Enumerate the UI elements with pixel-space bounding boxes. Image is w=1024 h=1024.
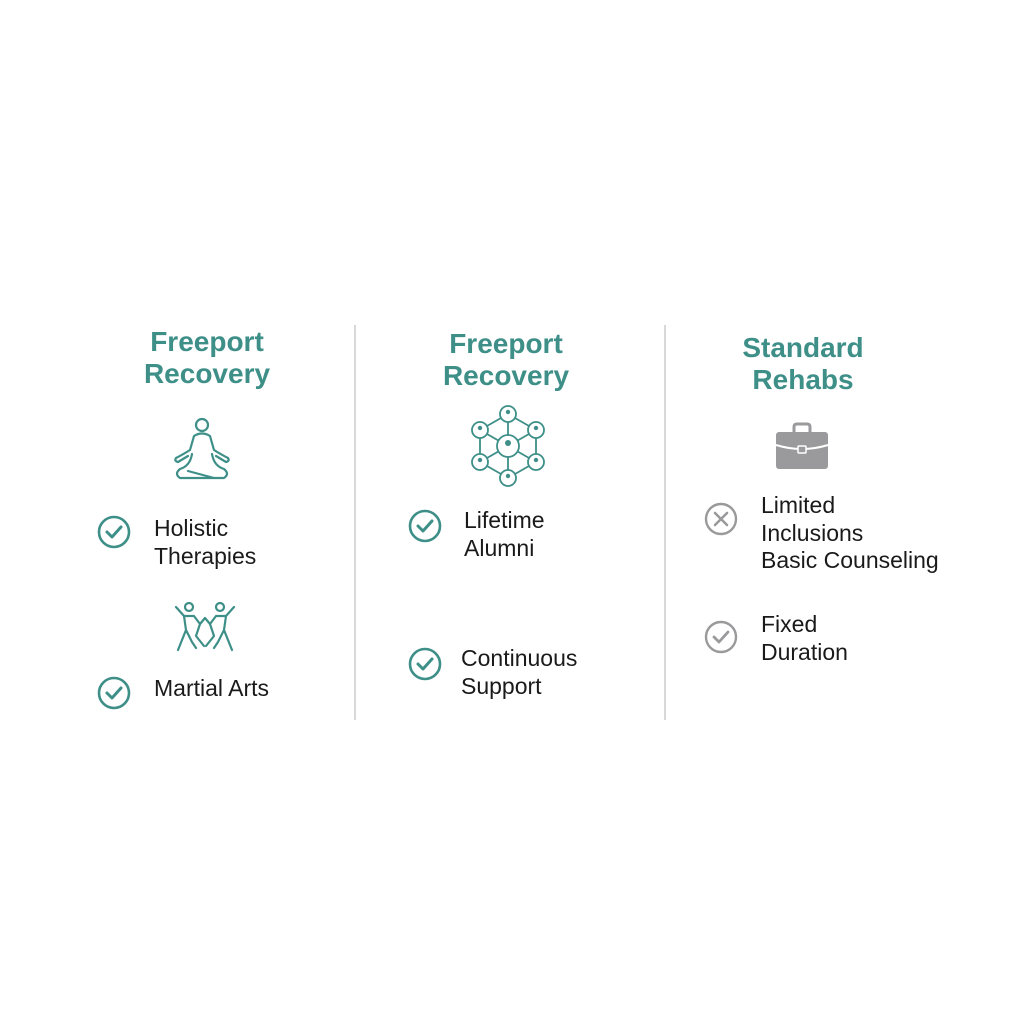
icon: briefcase <box>776 422 828 469</box>
title: Freeport Recovery col2 <box>443 328 569 391</box>
item: Continuous Support: Continuous <box>461 645 577 671</box>
item: Fixed Duration: Duration <box>761 638 848 664</box>
item: Lifetime Alumni <box>408 507 545 560</box>
item: Holistic Therapies: Holistic <box>154 515 228 541</box>
item: Limited Inclusions Basic Counseling: Inclusions <box>761 520 863 546</box>
title: Freeport Recovery col1: Freeport <box>150 326 264 357</box>
title: Standard Rehabs: Standard <box>742 332 864 363</box>
item: Lifetime Alumni: Lifetime <box>464 507 545 533</box>
title: Freeport Recovery col1 <box>144 326 270 389</box>
item: Martial Arts <box>98 675 269 710</box>
title: Standard Rehabs: Rehabs <box>752 364 854 395</box>
title: Freeport Recovery col2: Freeport <box>449 328 563 359</box>
item: Fixed Duration <box>704 611 848 664</box>
item: Limited Inclusions Basic Counseling <box>704 492 939 573</box>
item: Continuous Support <box>408 645 577 699</box>
icon: alumni network <box>471 405 545 487</box>
item: Limited Inclusions Basic Counseling: Basic Counseling <box>761 547 939 573</box>
icon: meditation <box>174 418 230 480</box>
title: Freeport Recovery col2: Recovery <box>443 360 569 391</box>
item: Holistic Therapies <box>98 515 256 569</box>
title: Freeport Recovery col1: Recovery <box>144 358 270 389</box>
item: Holistic Therapies: Therapies <box>154 542 256 568</box>
title: Standard Rehabs <box>742 332 864 395</box>
icon: martial arts <box>174 602 236 652</box>
item: Continuous Support: Support <box>461 672 542 698</box>
item: Limited Inclusions Basic Counseling: Limited <box>761 492 835 518</box>
item: Fixed Duration: Fixed <box>761 611 817 637</box>
item: Lifetime Alumni: Alumni <box>464 534 534 560</box>
item: Martial Arts: Martial Arts <box>154 675 269 701</box>
